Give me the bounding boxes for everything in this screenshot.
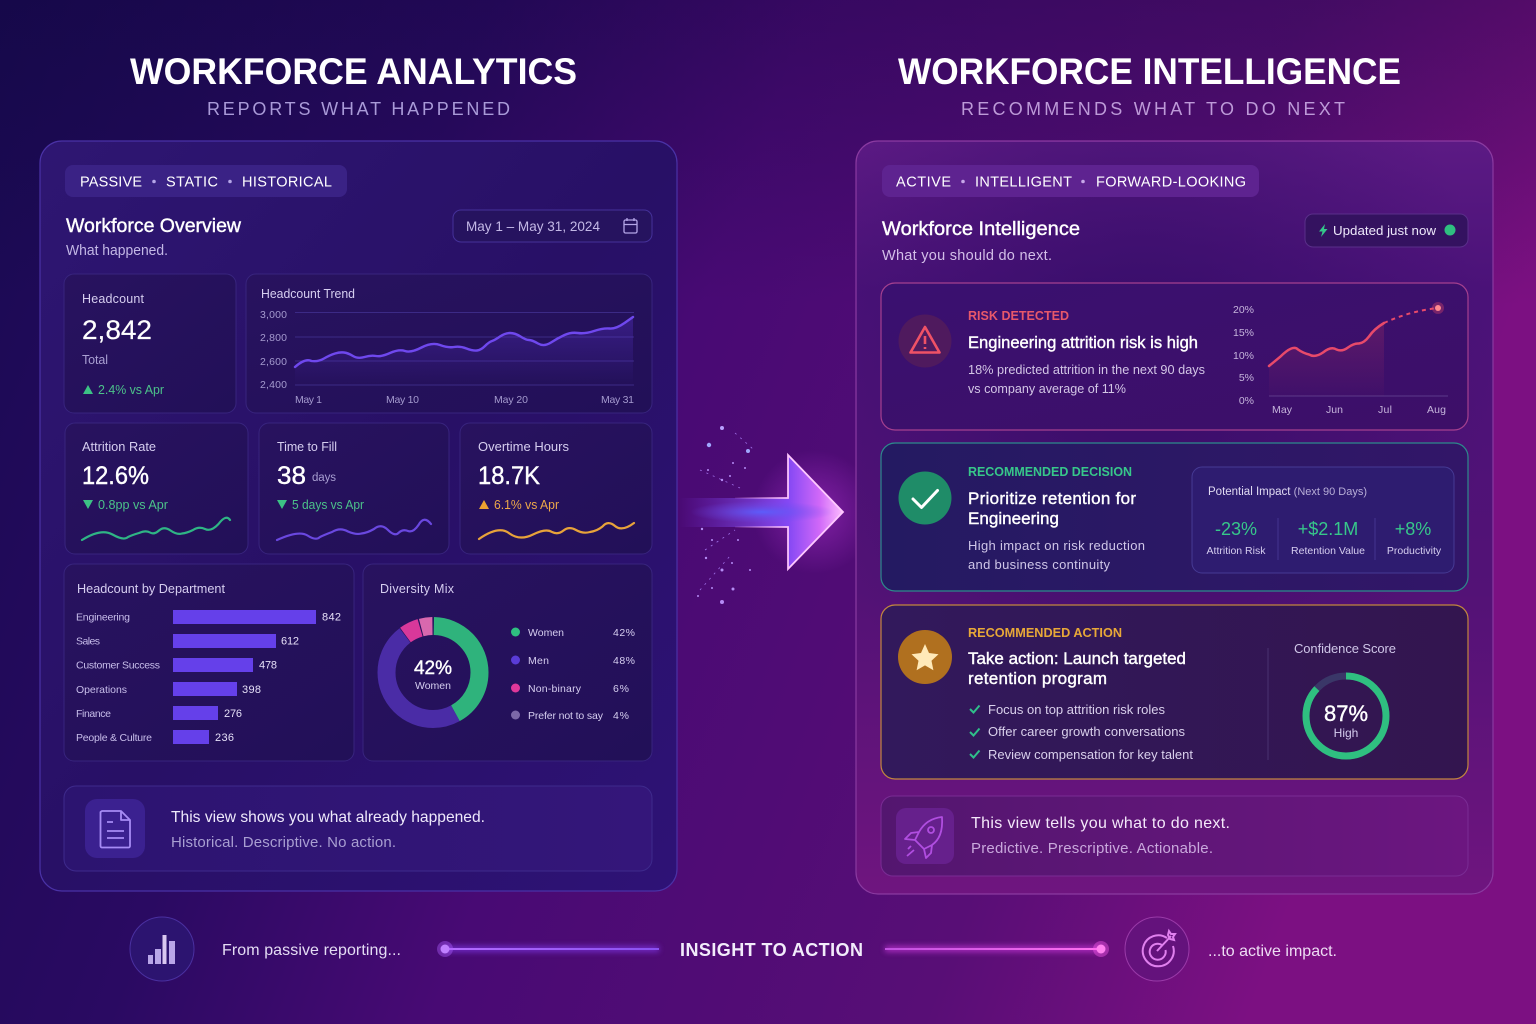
callout: what to do next — [881, 796, 1468, 876]
footer: insight to action band: From passive reporting... — [222, 942, 401, 959]
chart: headcount by department: Headcount by Department — [77, 582, 226, 596]
chart: headcount by department — [64, 564, 354, 761]
card: overtime hours — [460, 423, 652, 554]
card: attrition rate: 0.8pp vs Apr — [98, 498, 168, 512]
tag chip: active intelligent forward-looking: INTELLIGENT — [975, 174, 1072, 190]
chart: headcount trend: 2,800 — [260, 332, 287, 344]
legend: 6% — [613, 683, 629, 695]
connector: right — [885, 941, 1109, 957]
chart: headcount trend: May 10 — [386, 394, 419, 406]
chart: predicted attrition: 15% — [1233, 327, 1254, 339]
chart: diversity mix donut — [363, 564, 652, 761]
chart: headcount by department: Sales — [76, 636, 100, 648]
chart: headcount by department: 478 — [259, 660, 277, 672]
panel: potential impact: Potential Impact (Next 90 Days) — [1208, 486, 1367, 498]
gauge: confidence score: High — [1334, 726, 1358, 740]
card: time to fill: 38 — [277, 462, 306, 490]
chart: diversity mix donut: 42% — [414, 658, 452, 679]
tag chip: passive static historical: PASSIVE — [80, 174, 142, 190]
chart: diversity mix donut: Women — [415, 680, 451, 692]
legend: Non-binary — [528, 683, 582, 695]
icon: document — [85, 799, 145, 858]
chart: headcount by department: Operations — [76, 684, 127, 696]
chart: headcount by department: 842 — [322, 612, 341, 624]
card: headcount — [64, 274, 236, 413]
icon: rocket — [896, 808, 954, 864]
panel: potential impact: +$2.1M — [1298, 519, 1358, 539]
tag chip: active intelligent forward-looking: FORWARD-LOOKING — [1096, 174, 1246, 190]
card: overtime hours: 18.7K — [478, 462, 540, 490]
callout: what happened — [64, 786, 652, 871]
legend: 48% — [613, 655, 635, 667]
chart: headcount trend: May 20 — [494, 394, 528, 406]
tag chip: active intelligent forward-looking — [882, 165, 1259, 197]
chart: predicted attrition: May — [1272, 404, 1293, 416]
heading: workforce overview — [66, 215, 242, 259]
icon: target badge — [1125, 917, 1189, 981]
card: headcount: 2,842 — [82, 315, 152, 345]
title: workforce intelligence — [898, 51, 1401, 119]
tag chip: active intelligent forward-looking: ACTIVE — [896, 174, 951, 190]
card: risk detected: 18% predicted attrition in the next 90 days — [968, 362, 1205, 377]
icon: calendar — [624, 218, 637, 233]
title: workforce analytics: WORKFORCE ANALYTICS — [130, 51, 577, 92]
panel: potential impact: Productivity — [1387, 545, 1442, 557]
chart: headcount by department: Finance — [76, 708, 111, 720]
panel: potential impact: Retention Value — [1291, 545, 1365, 557]
card: recommended decision — [881, 443, 1468, 591]
chart: headcount trend: Headcount Trend — [261, 287, 355, 301]
legend — [511, 627, 635, 722]
card: time to fill — [259, 423, 449, 554]
card: headcount: Total — [82, 353, 108, 367]
particles — [697, 426, 753, 604]
checklist — [970, 702, 1193, 762]
chart: headcount trend: 2,600 — [260, 356, 287, 368]
gauge: confidence score: Confidence Score — [1294, 641, 1396, 656]
legend: Women — [528, 627, 564, 639]
card: time to fill: Time to Fill — [277, 440, 337, 454]
chart: diversity mix donut: Diversity Mix — [380, 582, 455, 596]
footer: insight to action band — [130, 917, 1337, 981]
heading: workforce overview: What happened. — [66, 243, 168, 259]
panel: potential impact: +8% — [1395, 519, 1431, 539]
heading: workforce overview: Workforce Overview — [66, 215, 242, 237]
arrow: transition from analytics to intelligence — [680, 426, 877, 604]
card: overtime hours: 6.1% vs Apr — [494, 498, 559, 512]
card: risk detected: RISK DETECTED — [968, 309, 1069, 323]
card: recommended action: Take action: Launch targeted — [968, 649, 1186, 668]
chart: headcount by department: 236 — [215, 732, 234, 744]
chart: predicted attrition: 0% — [1239, 395, 1254, 407]
tag chip: passive static historical — [65, 165, 347, 197]
chart: headcount by department: Customer Success — [76, 660, 160, 672]
title: workforce intelligence: RECOMMENDS WHAT TO DO NEXT — [961, 99, 1345, 119]
chart: headcount trend: 2,400 — [260, 379, 287, 391]
card: overtime hours: Overtime Hours — [478, 440, 569, 454]
card: recommended decision: Engineering — [968, 509, 1059, 528]
card: recommended action — [881, 605, 1468, 779]
connector: left — [437, 941, 659, 957]
card: time to fill: days — [312, 472, 336, 484]
chart: predicted attrition: Jun — [1326, 404, 1343, 416]
legend: Men — [528, 655, 549, 667]
card: recommended decision: High impact on risk reduction — [968, 538, 1145, 553]
gauge: confidence score: 87% — [1324, 701, 1368, 726]
panel: workforce analytics dashboard — [40, 141, 677, 891]
gauge: confidence score — [1294, 641, 1396, 756]
card: recommended action: RECOMMENDED ACTION — [968, 626, 1122, 640]
checklist: Review compensation for key talent — [988, 747, 1193, 762]
chart: headcount by department: People & Culture — [76, 732, 152, 744]
checklist: Offer career growth conversations — [988, 724, 1186, 739]
callout: what happened: Historical. Descriptive. No action. — [171, 834, 396, 851]
icon: bar chart badge — [130, 917, 194, 981]
chart: headcount trend — [246, 274, 652, 413]
chart: headcount by department: 612 — [281, 636, 299, 648]
heading: workforce intelligence: Workforce Intelligence — [882, 218, 1080, 240]
title: workforce analytics: REPORTS WHAT HAPPENED — [207, 99, 510, 119]
status pill: updated just now: Updated just now — [1333, 223, 1437, 238]
card: recommended decision: Prioritize retention for — [968, 489, 1136, 508]
footer: insight to action band: ...to active impact. — [1208, 943, 1337, 960]
card: attrition rate: 12.6% — [82, 462, 149, 490]
chart: headcount trend: May 31 — [601, 394, 634, 406]
chart: headcount by department: Engineering — [76, 612, 130, 624]
card: headcount: 2.4% vs Apr — [98, 383, 164, 397]
tag chip: passive static historical: HISTORICAL — [242, 174, 332, 190]
legend: Prefer not to say — [528, 710, 604, 722]
card: attrition rate: Attrition Rate — [82, 440, 156, 454]
chart: headcount by department: 276 — [224, 708, 242, 720]
callout: what to do next: Predictive. Prescriptive. Actionable. — [971, 840, 1213, 857]
chart: headcount trend: May 1 — [295, 394, 322, 406]
callout: what to do next: This view tells you what to do next. — [971, 815, 1230, 832]
card: risk detected: vs company average of 11% — [968, 381, 1126, 396]
legend: 4% — [613, 710, 629, 722]
panel: potential impact — [1192, 467, 1454, 573]
card: time to fill: 5 days vs Apr — [292, 498, 364, 512]
callout: what happened: This view shows you what already happened. — [171, 809, 485, 826]
date range selector: May 1 – May 31, 2024 — [466, 218, 600, 234]
chart: headcount trend: 3,000 — [260, 309, 287, 321]
checklist: Focus on top attrition risk roles — [988, 702, 1166, 717]
heading: workforce intelligence — [882, 218, 1080, 264]
icon: check — [898, 472, 952, 524]
card: risk detected — [881, 283, 1468, 430]
chart: predicted attrition: Aug — [1427, 404, 1446, 416]
panel: potential impact: Attrition Risk — [1207, 545, 1266, 557]
chart: predicted attrition: 5% — [1239, 372, 1254, 384]
chart: predicted attrition: 10% — [1233, 350, 1254, 362]
icon: warning — [898, 314, 952, 368]
title: workforce intelligence: WORKFORCE INTELLIGENCE — [898, 51, 1401, 92]
chart: headcount by department: 398 — [242, 684, 261, 696]
card: risk detected: Engineering attrition risk is high — [968, 333, 1198, 352]
legend: 42% — [613, 627, 635, 639]
panel: workforce intelligence dashboard — [856, 141, 1493, 894]
card: recommended decision: RECOMMENDED DECISION — [968, 465, 1132, 479]
footer: insight to action band: INSIGHT TO ACTION — [680, 940, 863, 960]
chart: predicted attrition: Jul — [1378, 404, 1392, 416]
tag chip: passive static historical: STATIC — [166, 174, 218, 190]
heading: workforce intelligence: What you should do next. — [882, 248, 1052, 264]
card: recommended decision: and business continuity — [968, 557, 1110, 572]
card: headcount: Headcount — [82, 292, 145, 306]
card: recommended action: retention program — [968, 669, 1107, 688]
chart: predicted attrition — [1233, 302, 1448, 416]
icon: star — [898, 630, 952, 684]
title: workforce analytics — [130, 51, 577, 119]
chart: predicted attrition: 20% — [1233, 304, 1254, 316]
card: attrition rate — [65, 423, 248, 554]
panel: potential impact: -23% — [1215, 519, 1257, 539]
date range selector — [453, 210, 652, 242]
status pill: updated just now — [1305, 214, 1468, 247]
